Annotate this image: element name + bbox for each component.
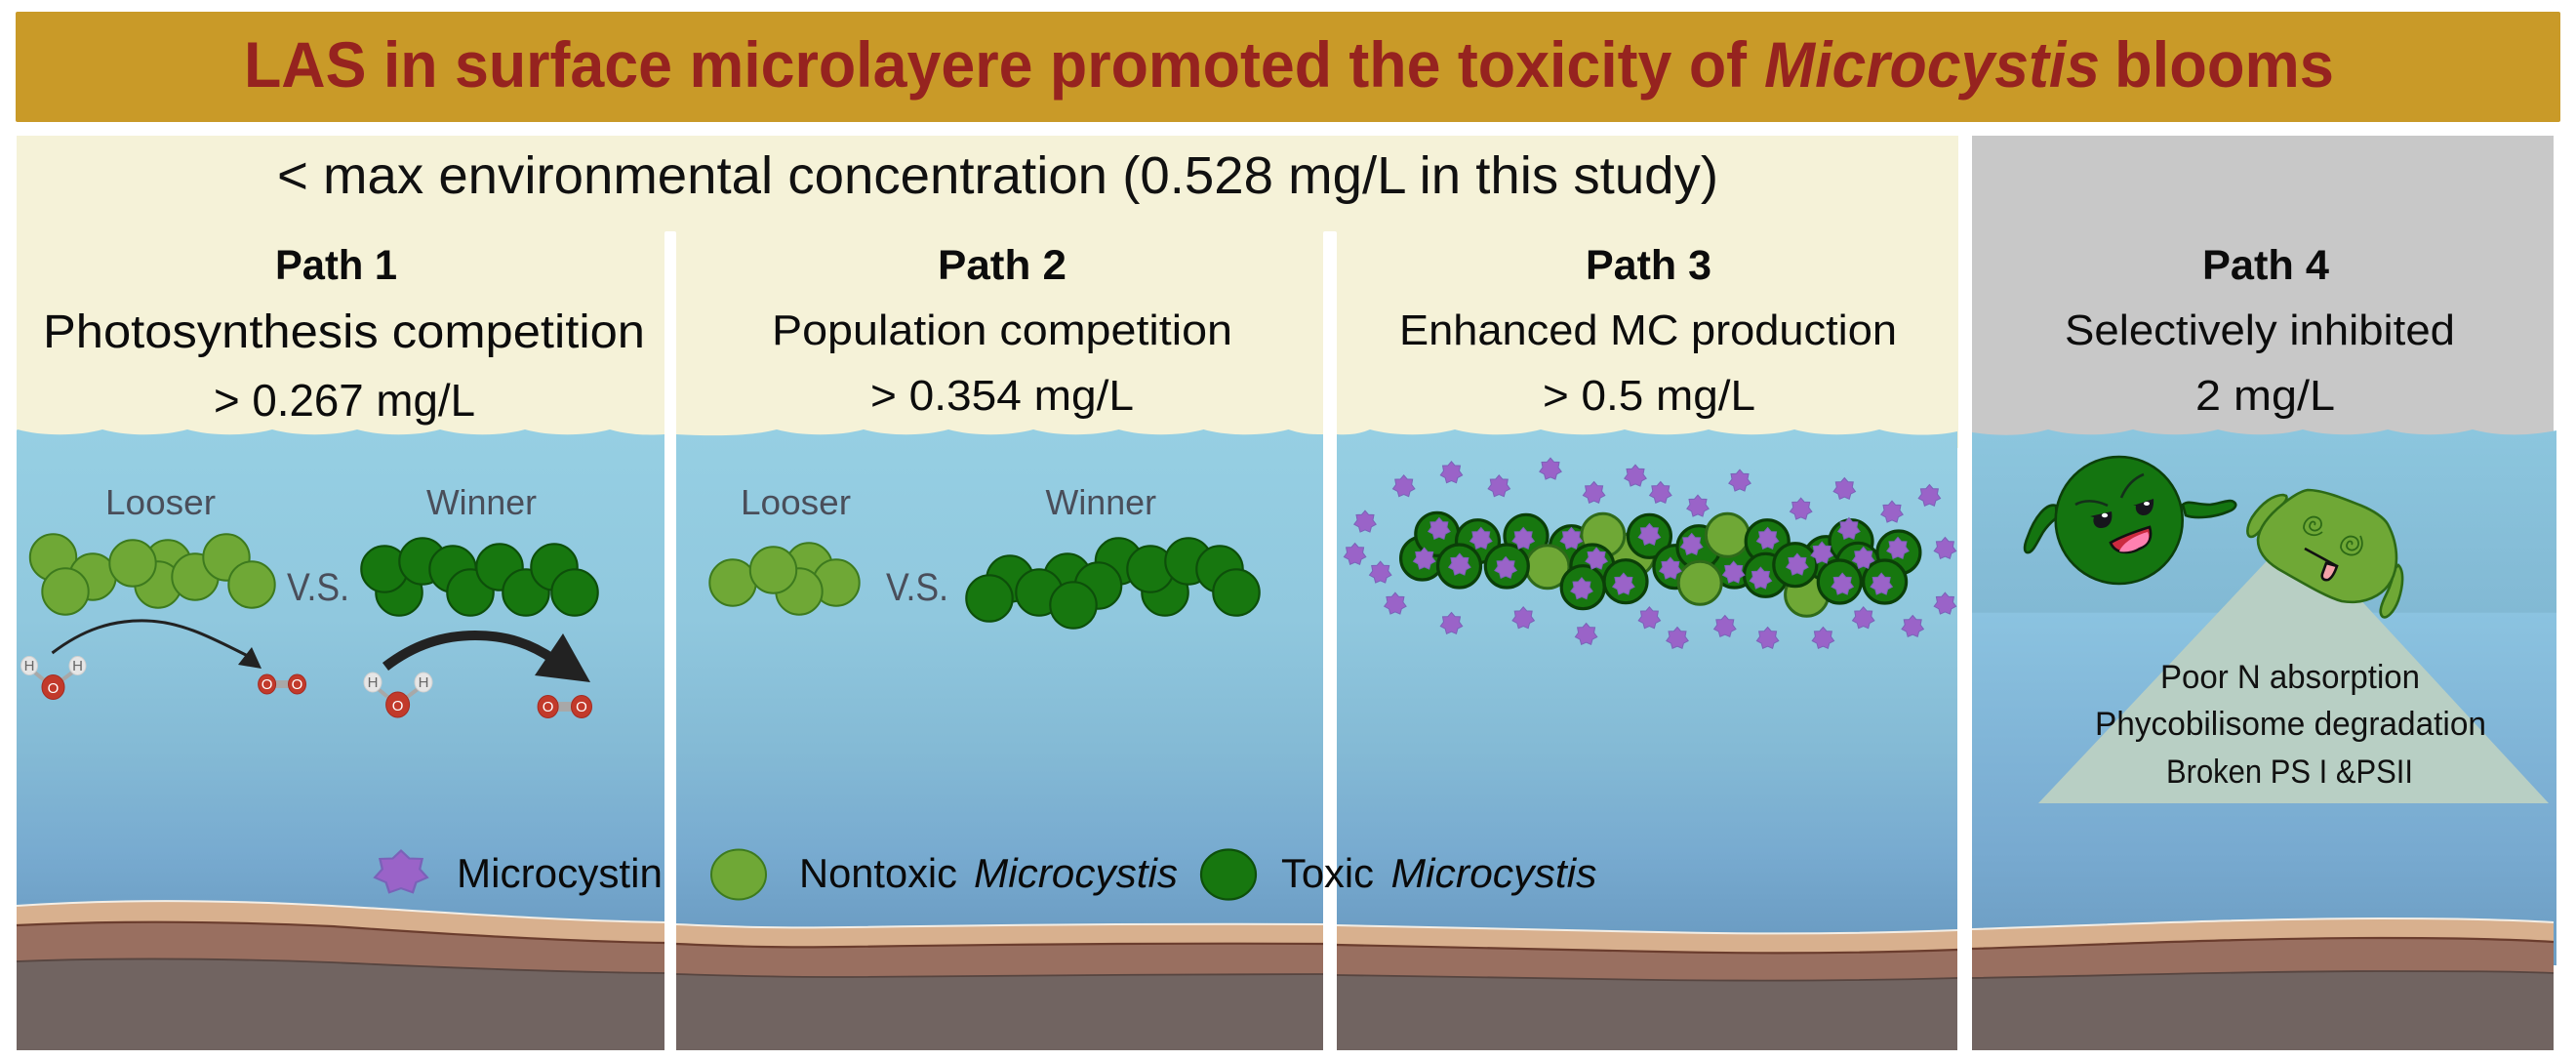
icon: water molecule, winner: O xyxy=(392,698,403,714)
heading: path 4: Selectively inhibited xyxy=(2065,306,2455,354)
icon: water molecule: H xyxy=(72,658,83,674)
divider between path 2 and 3 xyxy=(1323,231,1337,1060)
icon: water molecule, winner: H xyxy=(419,674,428,691)
heading: path 1 xyxy=(43,242,645,426)
icon: oxygen molecule: O xyxy=(262,676,272,693)
thin arrow: weak photosynthesis xyxy=(53,621,262,669)
heading: path 1: > 0.267 mg/L xyxy=(214,375,475,426)
heading: path 2: Path 2 xyxy=(938,242,1067,289)
legend: toxic microcystis: Toxic xyxy=(1281,850,1374,896)
label: winner: Winner xyxy=(426,482,537,522)
effects text xyxy=(2095,659,2486,791)
effects text: Broken PS I &PSII xyxy=(2166,754,2413,791)
heading: path 3: Enhanced MC production xyxy=(1399,306,1897,354)
icon: water molecule: H xyxy=(24,658,34,674)
water xyxy=(676,429,1323,937)
grey air background: path 4 xyxy=(1972,136,2554,448)
legend: nontoxic microcystis: Nontoxic xyxy=(799,850,957,896)
sediment layers xyxy=(1972,918,2554,1050)
heading: path 2: > 0.354 mg/L xyxy=(870,372,1134,420)
icon: dizzy nontoxic cell xyxy=(2247,490,2402,617)
icon: happy toxic cell xyxy=(2025,457,2235,584)
label: versus: V.S. xyxy=(886,566,948,609)
legend xyxy=(375,849,1597,900)
effects text: Poor N absorption xyxy=(2160,659,2420,696)
panel: path 3 xyxy=(1337,242,1957,1050)
legend: toxic microcystis xyxy=(1201,849,1596,900)
icon: water molecule, winner: H xyxy=(368,674,378,691)
divider between path 1 and 2 xyxy=(664,231,676,1060)
toxic cell cluster xyxy=(361,538,598,616)
heading: path 3: > 0.5 mg/L xyxy=(1543,372,1755,420)
cream air background: paths 1 to 3 xyxy=(17,136,1958,448)
heading: path 2: Population competition xyxy=(772,306,1232,354)
subtitle: concentration limit: < max environmental concentration (0.528 mg/L in this study) xyxy=(277,146,1718,205)
heading: path 4: Path 4 xyxy=(2202,242,2329,289)
heading: path 1: Photosynthesis competition xyxy=(43,306,645,358)
panel: path 4 xyxy=(1972,242,2556,1050)
title text: Microcystis xyxy=(1764,28,2100,101)
water xyxy=(1337,429,1957,937)
icon: oxygen molecule, winner xyxy=(538,695,591,718)
legend: microcystin: Microcystin xyxy=(457,850,663,896)
label: versus: V.S. xyxy=(287,566,349,609)
legend: toxic microcystis: Microcystis xyxy=(1391,850,1596,896)
sediment layers xyxy=(1337,925,1957,1050)
heading: path 4 xyxy=(2065,242,2455,420)
panel: path 1 xyxy=(17,242,664,1050)
heading: path 3: Path 3 xyxy=(1586,242,1711,289)
light beam triangle xyxy=(2038,530,2549,803)
title text: blooms xyxy=(2114,28,2334,101)
toxic cell cluster xyxy=(966,538,1260,629)
legend: nontoxic microcystis xyxy=(711,849,1178,900)
heading: path 4: 2 mg/L xyxy=(2195,372,2335,420)
panel: path 2 xyxy=(676,242,1323,1050)
sediment layers xyxy=(17,901,664,1050)
icon: oxygen molecule, winner: O xyxy=(543,699,553,715)
title banner xyxy=(16,12,2560,122)
icon: water molecule, winner xyxy=(364,673,432,717)
icon: water molecule xyxy=(21,656,86,699)
icon: oxygen molecule: O xyxy=(292,676,302,693)
effects text: Phycobilisome degradation xyxy=(2095,706,2486,743)
label: looser: Looser xyxy=(741,482,851,522)
label: winner: Winner xyxy=(1046,482,1156,522)
heading: path 2 xyxy=(772,242,1232,420)
water xyxy=(1972,429,2556,965)
nontoxic cell cluster xyxy=(709,543,860,615)
icon: oxygen molecule xyxy=(259,674,306,694)
bloom: mixed cells releasing microcystin xyxy=(1344,458,1956,648)
thick arrow: strong photosynthesis xyxy=(385,633,590,682)
label: looser: Looser xyxy=(105,482,216,522)
nontoxic cell cluster xyxy=(30,534,275,615)
legend: nontoxic microcystis: Microcystis xyxy=(974,850,1178,896)
heading: path 3 xyxy=(1399,242,1897,420)
water xyxy=(17,429,664,937)
title text: LAS in surface microlayere promoted the toxicity of xyxy=(244,28,1748,101)
icon: water molecule: O xyxy=(48,680,59,697)
icon: oxygen molecule, winner: O xyxy=(576,699,587,715)
heading: path 1: Path 1 xyxy=(275,242,397,289)
sediment layers xyxy=(676,924,1323,1050)
